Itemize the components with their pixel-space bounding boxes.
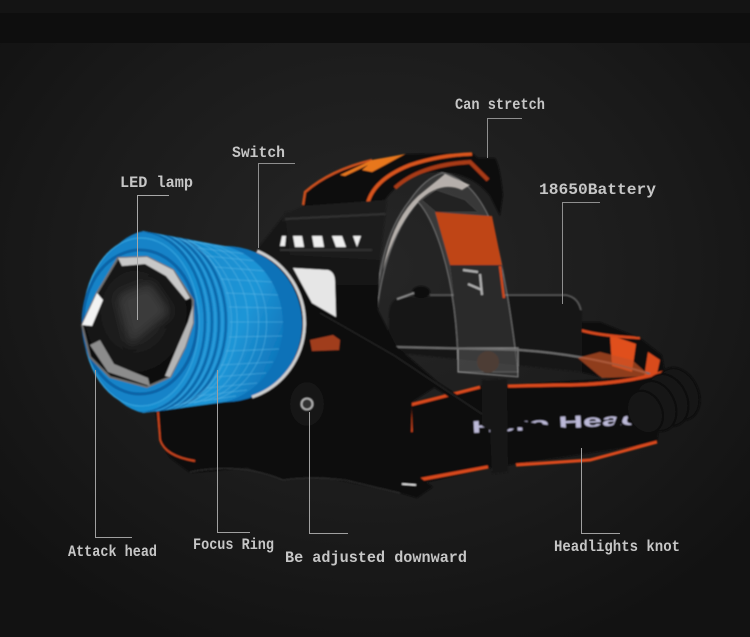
adjusting screw	[290, 382, 324, 426]
battery box	[388, 286, 582, 372]
blue lamp barrel	[118, 230, 308, 414]
barrel rib highlights	[142, 231, 230, 413]
callout: Be adjusted downward: Be adjusted downward	[285, 549, 467, 567]
callout: Can stretch: Can stretch	[455, 96, 545, 114]
body	[155, 200, 440, 498]
headlamp illustration	[82, 153, 708, 498]
top head strap	[303, 153, 503, 216]
front bezel	[83, 238, 199, 406]
callout: Can stretch	[455, 96, 545, 158]
strap clip	[482, 379, 508, 474]
callout: 18650Battery	[539, 181, 656, 304]
clear rim reflection	[578, 352, 650, 378]
rear strap	[578, 322, 666, 386]
callout: Attack head	[68, 370, 157, 561]
callout: LED lamp: LED lamp	[120, 174, 193, 192]
callout: 18650Battery: 18650Battery	[539, 181, 656, 199]
callout: Switch	[232, 144, 295, 248]
callout: Headlights knot	[554, 448, 680, 556]
power cord	[312, 308, 627, 438]
callout: Switch: Switch	[232, 144, 285, 162]
side head strap: Hero Head	[471, 409, 642, 437]
callout: Focus Ring: Focus Ring	[193, 536, 274, 554]
silver end ring	[252, 251, 305, 397]
zoom lens	[82, 257, 193, 387]
coiled cord	[620, 361, 708, 439]
clear plastic band	[377, 173, 518, 377]
rear barrel band	[213, 244, 297, 406]
side head strap	[400, 372, 666, 486]
callout: LED lamp	[120, 174, 193, 320]
orange switch tab	[310, 335, 340, 351]
barrel ribs	[139, 231, 226, 413]
rear collar of lamp head	[172, 250, 308, 398]
clear band horizontal rim	[396, 347, 650, 374]
callout: Focus Ring	[193, 370, 274, 554]
knurled grid	[174, 238, 283, 406]
infographic: headlamp with labelled parts	[68, 44, 700, 566]
callout: Headlights knot: Headlights knot	[554, 538, 680, 556]
callout: Attack head: Attack head	[68, 543, 157, 561]
callout: Be adjusted downward	[285, 412, 467, 567]
